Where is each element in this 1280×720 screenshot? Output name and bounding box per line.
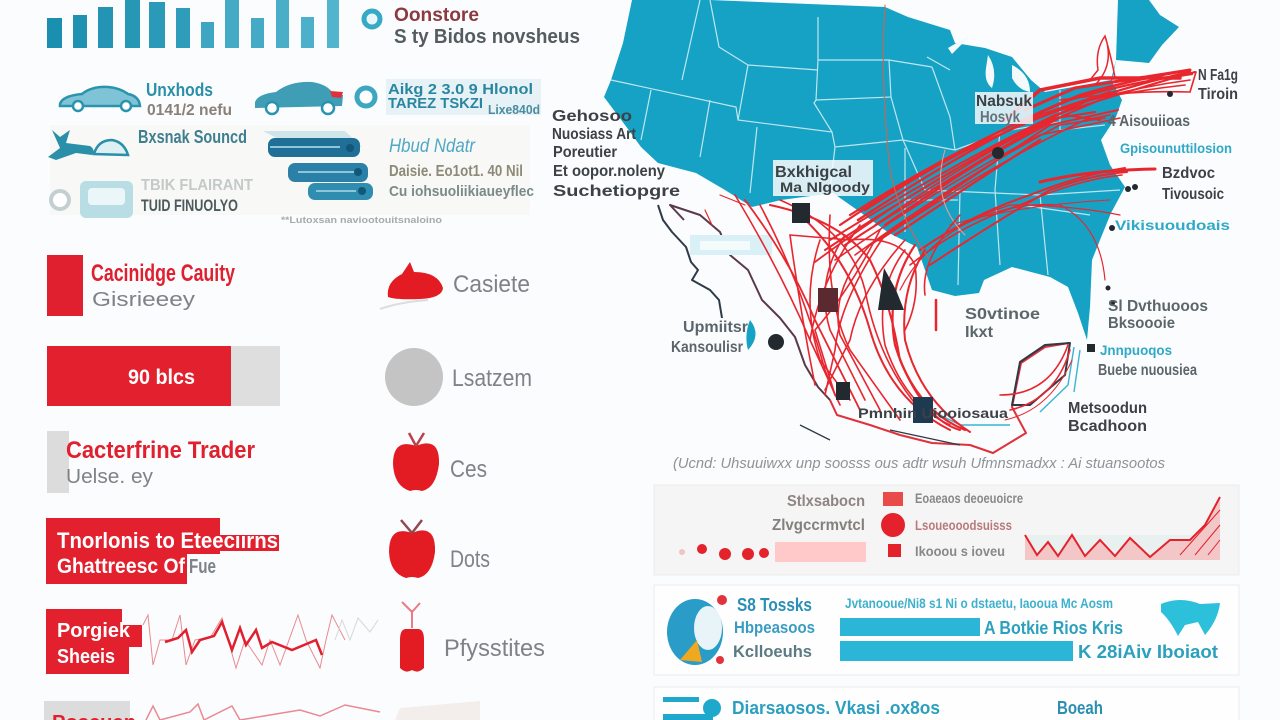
bar: second: K 28iAiv Iboiaot [1078, 642, 1218, 662]
text block: truck label: Hbud Ndatr [389, 136, 476, 157]
text block: car one label [146, 80, 232, 119]
map: pale baja block [690, 235, 772, 255]
map: mexico outline [658, 205, 1080, 453]
panel: red row three: Uelse. ey [66, 466, 153, 488]
icon: car two [255, 82, 343, 114]
text block: pale label: TBIK FLAIRANT [141, 177, 253, 194]
label: hat: Casiete [453, 271, 530, 298]
text block: stat label: S8 Tossks [737, 595, 812, 615]
label: west coast cities: Gehosoo [552, 108, 632, 125]
chart: area line [1025, 497, 1220, 560]
text: bottom right label: Boeah [1057, 698, 1103, 718]
panel: red legend [654, 485, 1239, 575]
footnote: **Lutoxsan naviootouitsnaloino [281, 215, 443, 225]
icon: top circle [364, 11, 380, 27]
panel: red row two: 90 blcs [128, 366, 195, 389]
text block: car one label: Unxhods [146, 80, 213, 100]
text block: stat label [733, 595, 815, 661]
label: north east: N Fa1g [1198, 67, 1238, 84]
icon: gray ring [51, 191, 69, 209]
panel: red row three: Cacterfrine Trader [66, 437, 255, 464]
icon: red bottle [400, 602, 424, 672]
panel: red row four: Tnorlonis to Eteeciirns [57, 528, 278, 553]
label: central map note: Bxkhigcal [775, 164, 852, 181]
label: florida: Sl Dvthuooos [1108, 298, 1208, 315]
icon: apple two [389, 520, 435, 578]
label: legend right: Eoaeaos deoeuoicre [915, 490, 1023, 506]
label: legend left: Stlxsabocn [787, 493, 865, 510]
label: apple two: Dots [450, 546, 490, 573]
text block: truck label [389, 136, 534, 200]
label: north east: Gpisounuttilosion [1120, 140, 1232, 156]
label: north east: 4 Aisouiioas [1108, 113, 1190, 130]
map: north america [604, 0, 1179, 340]
label: east coast: Tivousoic [1162, 186, 1224, 203]
panel: blue stats [654, 585, 1239, 675]
icon: dog and car [48, 130, 128, 160]
bar: pink [775, 542, 866, 562]
label: caribbean: Buebe nuousiea [1098, 362, 1197, 379]
panel: vehicles background [50, 125, 530, 215]
label: west coast cities: Suchetiopgre [553, 183, 680, 200]
panel: bottom red row [44, 701, 480, 720]
panel: red row five with waveform: Porgiek [57, 620, 131, 642]
text block: truck label: Daisie. Eo1ot1. 40 Nil [389, 163, 523, 180]
icon: globe collage [667, 595, 727, 665]
label: lakes note [975, 92, 1033, 126]
panel: top bar chart [47, 0, 339, 48]
label: gulf: Ikxt [965, 324, 994, 341]
label: florida [1108, 298, 1208, 332]
icon: pale rounded box [80, 181, 133, 218]
panel: red row two [47, 346, 280, 406]
label: gulf: S0vtinoe [965, 306, 1040, 323]
panel: red row three [47, 431, 255, 493]
icon: car one [60, 87, 140, 111]
icon: apple one [393, 433, 439, 491]
panel: red row five with waveform: Sheeis [57, 646, 115, 668]
panel: red row five with waveform [46, 609, 378, 674]
icon: small ring [357, 88, 375, 106]
map caption: (Ucnd: Uhsuuiwxx unp soosss ous adtr wsuh Ufmnsmadxx : Ai stuansootos [673, 455, 1165, 472]
panel: red legend: Zlvgccrmvtcl [772, 517, 865, 534]
chart: red trade routes [705, 5, 1196, 432]
text: bottom headline: Diarsaosos. Vkasi .ox8os [732, 698, 940, 718]
text block: top legend: Oonstore [394, 5, 479, 26]
panel: red row one: Gisrieeey [92, 289, 195, 311]
label: east coast: Bzdvoc [1162, 165, 1215, 182]
label: florida: Bksoooie [1108, 315, 1175, 332]
text block: top legend: S ty Bidos novsheus [394, 26, 580, 48]
label: west coast cities: Nuosiass Art [552, 126, 637, 143]
label: north east [1108, 67, 1238, 156]
bar: first [840, 618, 1123, 638]
label: caribbean: Jnnpuoqos [1100, 342, 1172, 358]
label: lakes note: Nabsuk [976, 93, 1032, 110]
label: mexico south: Pmnhin Uiooiosaua [858, 405, 1008, 421]
bar: second [840, 641, 1218, 662]
icon: red hat [380, 262, 443, 309]
label: lakes note: Hosyk [980, 109, 1020, 126]
text block: stat label: Hbpeasoos [734, 618, 815, 637]
label: gulf [965, 306, 1040, 341]
label: west coast cities: Poreutier [553, 144, 617, 161]
blue headline: Jvtanooue/Ni8 s1 Ni o dstaetu, Iaooua Mc Aosm [845, 595, 1113, 611]
panel: red row one: Cacinidge Cauity [91, 260, 235, 287]
icon: trucks [263, 131, 373, 200]
panel: red row one [47, 255, 235, 316]
label: caribbean: Bcadhoon [1068, 418, 1147, 435]
label: west coast cities: Et oopor.noleny [553, 163, 665, 180]
text block: top legend [394, 5, 580, 48]
label: caribbean: Metsoodun [1068, 400, 1147, 417]
label: mexico west [671, 319, 756, 356]
label: bottle: Pfysstites [444, 635, 545, 662]
label: circle: Lsatzem [452, 365, 532, 392]
text block: highlighted label: Lixe840d [488, 102, 540, 117]
bar: first: A Botkie Rios Kris [984, 618, 1123, 638]
map: US landmass [604, 0, 1179, 340]
panel: red row four: Fue [189, 556, 216, 578]
text block: dog label: Bxsnak Souncd [138, 127, 247, 147]
map: city markers [768, 91, 1173, 423]
label: mexico west: Upmiitsr [683, 319, 748, 336]
label: mexico west: Kansoulisr [671, 339, 743, 356]
text block: pale label [141, 177, 253, 215]
map: great lakes [948, 34, 1030, 92]
panel: bottom blue [654, 687, 1239, 720]
icon: red dots [679, 544, 769, 560]
label: east coast: Vikisuoudoais [1115, 217, 1230, 233]
panel: red row four [46, 518, 279, 584]
label: north east: Tiroin [1198, 86, 1238, 103]
label: west coast cities [552, 108, 680, 200]
label: caribbean [1068, 342, 1197, 435]
text block: highlighted label: TAREZ TSKZI [388, 95, 483, 112]
text block: truck label: Cu iohsuoliikiaueyflec [389, 183, 534, 200]
icon: red legend marks [881, 492, 905, 557]
label: apple one: Ces [450, 456, 487, 483]
panel: red legend: Lsoueooodsuisss [915, 517, 1012, 533]
text block: pale label: TUID FINUOLYO [141, 196, 238, 215]
map: state borders [611, 0, 1120, 285]
text block: highlighted label: Aikg 2 3.0 9 Hlonol [388, 81, 533, 98]
text block: stat label: Kclloeuhs [733, 642, 812, 661]
text block: highlighted label [386, 79, 541, 117]
label: central map note [773, 160, 873, 196]
label: east coast [1115, 165, 1230, 233]
icon: cyan map [1161, 600, 1220, 636]
label: central map note: Ma Nlgoody [780, 179, 870, 195]
panel: red legend: Ikooou s ioveu [915, 543, 1005, 559]
panel: red row four: Ghattreesc Of [57, 555, 186, 578]
icon: gray circle [385, 348, 443, 406]
icon: bottom badge [663, 697, 721, 720]
text block: car one label: 0141/2 nefu [147, 102, 232, 119]
